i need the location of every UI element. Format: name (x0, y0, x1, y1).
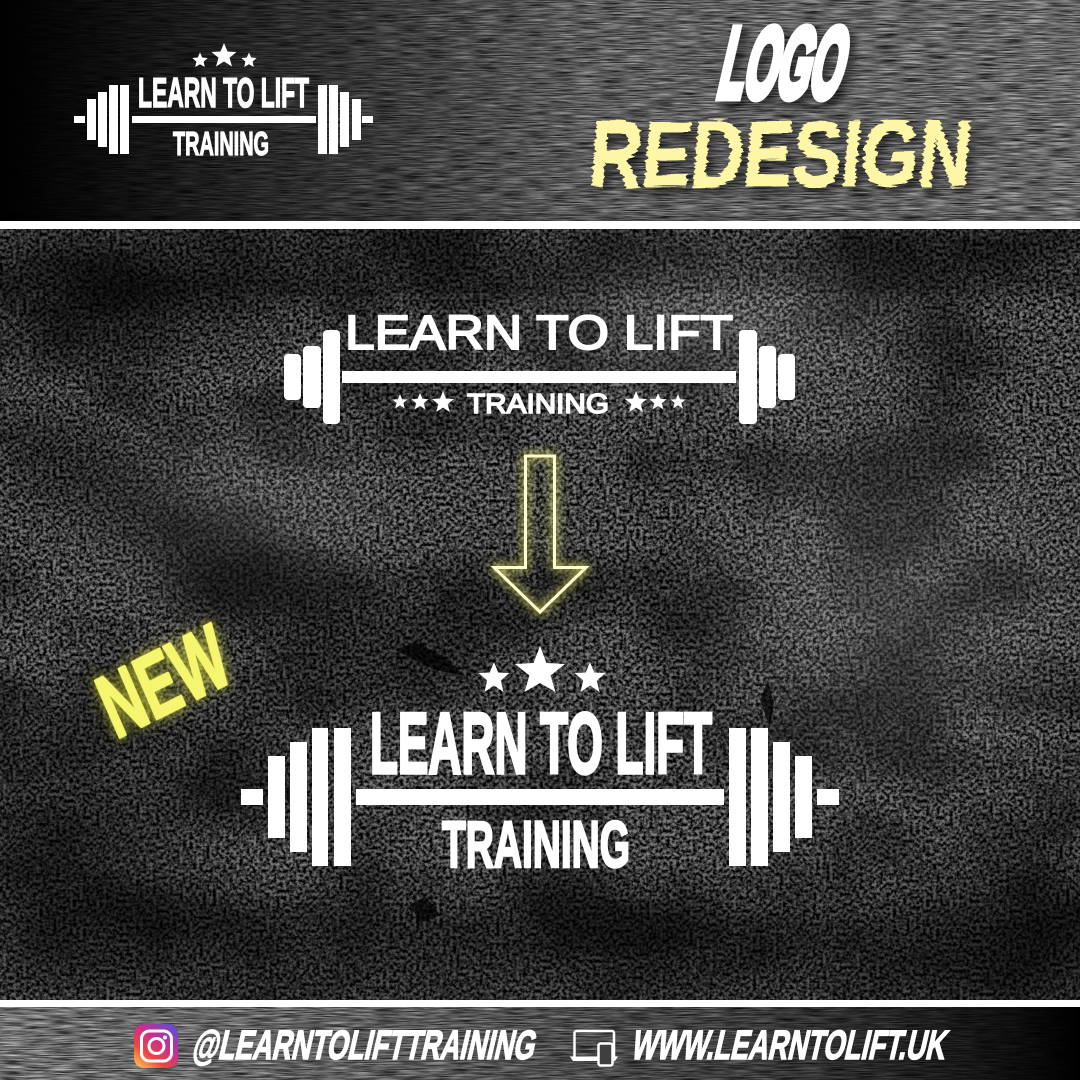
text: instagram handle: @LEARNTOLIFTTRAINING (189, 1021, 542, 1068)
panel: brushed metal header (0, 0, 1080, 221)
text: learn to lift: LEARN TO LIFT (138, 69, 309, 116)
text: training: TRAINING (467, 388, 609, 419)
icon: three stars (478, 646, 606, 692)
icon: three stars (192, 43, 257, 67)
text: training: TRAINING (173, 125, 269, 162)
old logo thumbnail in header (74, 43, 373, 162)
new logo (241, 646, 839, 881)
icon: left stars (392, 391, 454, 412)
icon: instagram (134, 1024, 178, 1068)
icon: right stars (625, 391, 686, 412)
text: training: TRAINING (442, 807, 630, 881)
text: learn to lift: LEARN TO LIFT (370, 696, 712, 792)
icon: laptop and phone (570, 1031, 618, 1066)
icon: rounded barbell (284, 330, 795, 424)
icon: barbell (241, 728, 839, 866)
panel: brushed metal footer (0, 1007, 1080, 1080)
title: redesign: REDESIGN (585, 101, 976, 206)
text: LOGO (710, 8, 860, 119)
text: learn to lift: LEARN TO LIFT (345, 307, 733, 360)
arrow: neon down arrow (494, 456, 586, 612)
previous logo (284, 307, 795, 424)
icon: barbell (74, 85, 373, 154)
label: new neon text: NEW (84, 605, 244, 758)
